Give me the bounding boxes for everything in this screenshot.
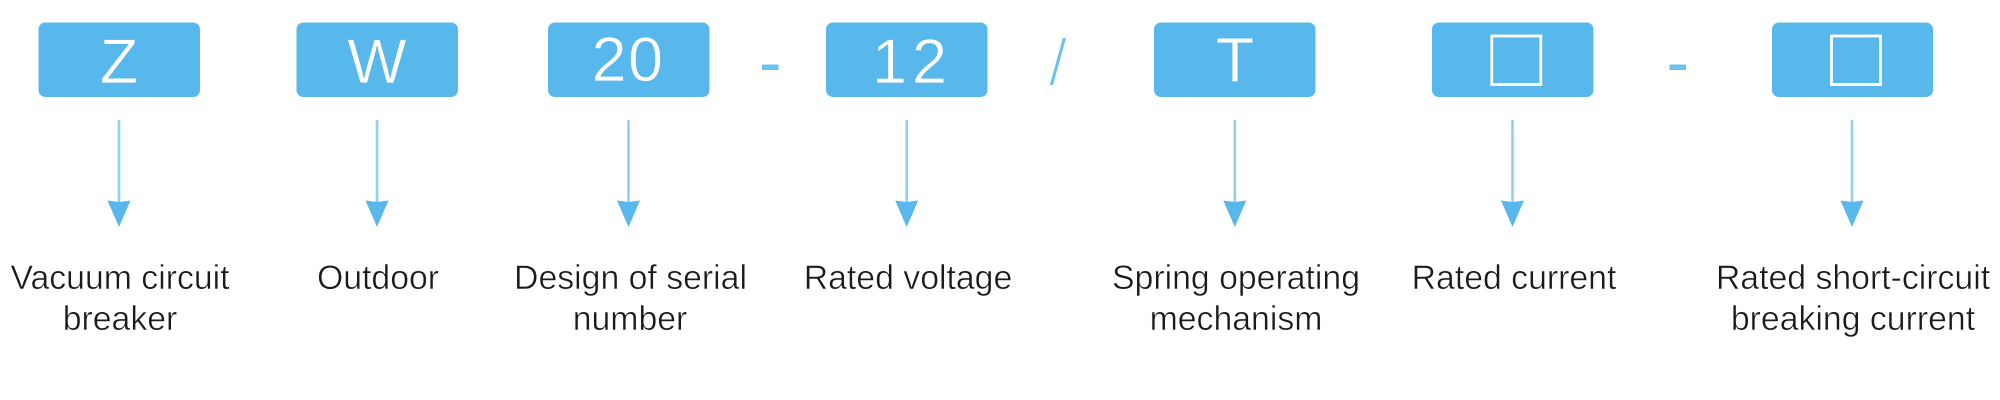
- code box: 12: 12: [872, 27, 952, 97]
- code box: T: T: [1216, 26, 1254, 96]
- arrow: blank to rated short-circuit breaking current: [1840, 120, 1864, 227]
- arrow: Z to vacuum circuit breaker: [108, 120, 130, 227]
- arrow: T to spring operating mechanism: [1223, 120, 1246, 227]
- code box: 20: 20: [591, 25, 665, 95]
- label: design of serial number: Design of serial: [514, 259, 747, 297]
- label: vacuum circuit breaker: Vacuum circuit: [10, 259, 230, 297]
- label: vacuum circuit breaker: [10, 259, 230, 338]
- arrow: W to outdoor: [366, 120, 388, 227]
- label: design of serial number: number: [573, 300, 687, 338]
- separator: slash: [1050, 38, 1066, 85]
- code box: T: [1154, 22, 1316, 97]
- code box: Z: Z: [100, 27, 138, 97]
- arrow: blank to rated current: [1501, 120, 1524, 227]
- label: rated short-circuit breaking current: [1716, 259, 1991, 338]
- code box: blank rated short-circuit breaking current: [1772, 22, 1933, 97]
- label: vacuum circuit breaker: breaker: [63, 300, 177, 338]
- label: outdoor: Outdoor: [317, 259, 439, 297]
- label: rated short-circuit breaking current: Rated short-circuit: [1716, 259, 1991, 297]
- code box: 12: [826, 22, 988, 97]
- code box: W: [296, 22, 458, 97]
- code box: Z: [38, 22, 200, 97]
- arrow: 20 to design of serial number: [617, 120, 640, 227]
- code box: 20: [548, 22, 710, 97]
- arrow: 12 to rated voltage: [895, 120, 918, 227]
- label: rated voltage: Rated voltage: [804, 259, 1012, 297]
- label: spring operating mechanism: [1112, 259, 1360, 338]
- code box: W: W: [347, 27, 407, 97]
- label: design of serial number: [514, 259, 747, 338]
- separator: hyphen: [762, 64, 778, 70]
- label: rated short-circuit breaking current: breaking current: [1731, 300, 1976, 338]
- label: rated current: Rated current: [1412, 259, 1617, 297]
- label: spring operating mechanism: Spring operating: [1112, 259, 1360, 297]
- code box: blank rated current: [1432, 22, 1594, 97]
- separator: hyphen: [1670, 64, 1686, 70]
- label: spring operating mechanism: mechanism: [1150, 300, 1322, 338]
